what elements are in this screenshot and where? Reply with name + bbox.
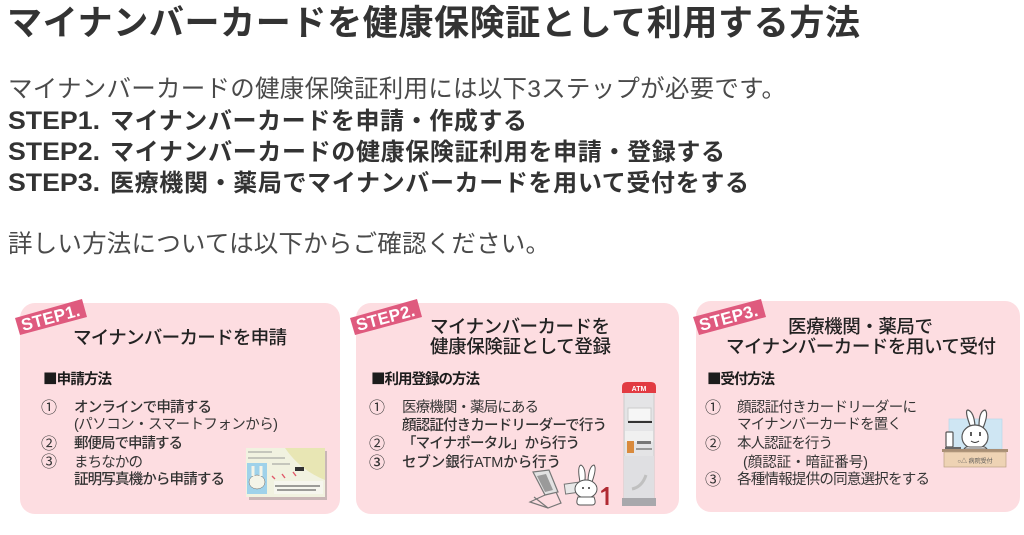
icon: red number one — [601, 487, 608, 505]
numbered list — [705, 394, 930, 490]
icon: my number card — [246, 448, 327, 500]
step 2 badge: STEP2. — [354, 301, 417, 335]
numbered list: ② — [705, 430, 721, 454]
title: マイナンバーカードを健康保険証として利用する方法 — [7, 4, 860, 43]
numbered list: マイナンバーカードを置く — [737, 416, 902, 433]
numbered list: ① — [705, 394, 721, 418]
numbered list: 証明写真機から申請する — [74, 470, 225, 488]
section label: ■申請方法 — [43, 368, 112, 389]
numbered list: セブン銀行ATMから行う — [402, 453, 561, 471]
step 1 summary: マイナンバーカードを申請・作成する — [110, 108, 527, 135]
numbered list: (顔認証・暗証番号) — [743, 454, 868, 471]
icon: reception desk with rabbit: ○△ 病院受付 — [957, 457, 993, 465]
step 3 badge: STEP3. — [697, 301, 760, 335]
panel: step 1 — [15, 299, 340, 514]
panel heading — [430, 316, 611, 357]
numbered list: ① — [369, 394, 385, 418]
step 2 summary: マイナンバーカードの健康保険証利用を申請・登録する — [110, 139, 725, 166]
numbered list — [41, 394, 278, 488]
step 3 summary: STEP3. — [8, 169, 100, 197]
panel heading: 健康保険証として登録 — [430, 336, 611, 357]
panel heading: マイナンバーカードを申請 — [73, 327, 287, 348]
panel heading: 医療機関・薬局で — [788, 316, 933, 337]
panel background — [696, 301, 1020, 512]
numbered list: 各種情報提供の同意選択をする — [737, 471, 930, 488]
panel background — [356, 303, 679, 514]
numbered list: 顔認証付きカードリーダーに — [737, 399, 917, 416]
panel heading: マイナンバーカードを — [430, 316, 610, 337]
intro sentence: マイナンバーカードの健康保険証利用には以下3ステップが必要です。 — [8, 75, 786, 103]
panel heading: マイナンバーカードを用いて受付 — [726, 336, 996, 357]
panel heading — [726, 316, 996, 357]
numbered list: ③ — [705, 466, 721, 490]
icon: ATM — [622, 382, 656, 506]
numbered list: ① — [41, 394, 57, 418]
step 2 summary: STEP2. — [8, 138, 100, 166]
numbered list: ③ — [369, 449, 385, 473]
numbered list: 「マイナポータル」から行う — [402, 435, 580, 452]
step 1 summary: STEP1. — [8, 107, 100, 135]
icon: rabbit holding card — [564, 465, 597, 505]
section label: ■利用登録の方法 — [371, 368, 480, 389]
step 1 badge: STEP1. — [19, 301, 82, 335]
step 3 summary: 医療機関・薬局でマイナンバーカードを用いて受付をする — [110, 170, 749, 197]
numbered list: ② — [41, 430, 57, 454]
numbered list: 顔認証付きカードリーダーで行う — [402, 416, 607, 434]
numbered list: (パソコン・スマートフォンから) — [74, 416, 278, 433]
panel background — [20, 303, 340, 514]
icon: card reader — [530, 470, 561, 508]
numbered list — [369, 394, 607, 473]
numbered list: 本人認証を行う — [737, 435, 833, 452]
numbered list: 郵便局で申請する — [74, 435, 183, 452]
details note: 詳しい方法については以下からご確認ください。 — [8, 230, 550, 258]
intro text block — [8, 75, 786, 197]
icon: ATM: ATM — [632, 386, 646, 393]
section label: ■受付方法 — [707, 368, 776, 389]
numbered list: ② — [369, 430, 385, 454]
numbered list: ③ — [41, 448, 57, 472]
icon: reception desk with rabbit — [942, 410, 1008, 467]
numbered list: まちなかの — [74, 454, 143, 471]
numbered list: 医療機関・薬局にある — [402, 399, 539, 416]
panel: step 3 — [693, 299, 1020, 512]
numbered list: オンラインで申請する — [74, 399, 212, 416]
panel: step 2 — [350, 299, 679, 514]
